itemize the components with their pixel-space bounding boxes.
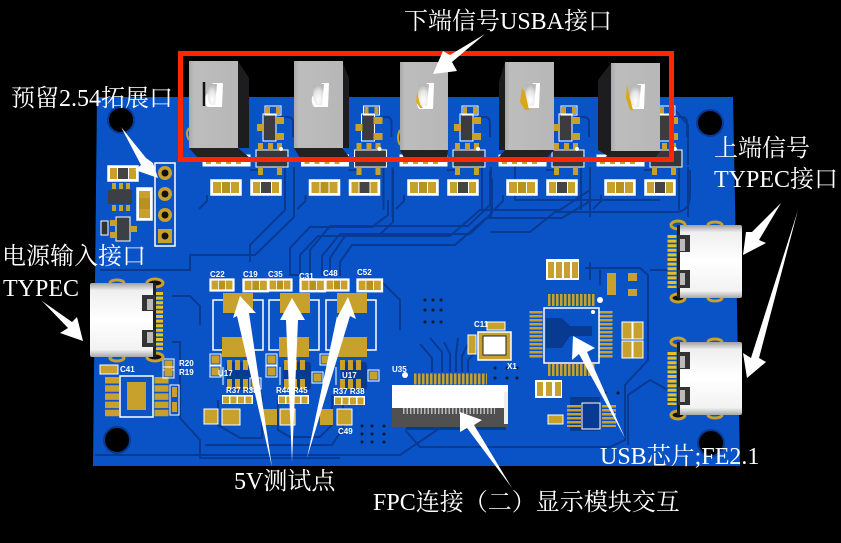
mounting holes — [104, 107, 724, 456]
crystal: X1 — [507, 362, 517, 371]
capacitor labels: C35 — [268, 270, 283, 279]
USB-A connector 3 — [398, 62, 448, 158]
small labels — [218, 369, 365, 436]
capacitor labels: C48 — [323, 269, 338, 278]
pins — [548, 294, 596, 306]
chip outline — [544, 308, 599, 363]
USB-C connector: upstream 1 — [671, 221, 742, 302]
regulators — [210, 354, 379, 405]
small labels: U17 — [342, 371, 357, 380]
power section: inductors and capacitors — [204, 268, 382, 436]
arrow: 5V test point 2 — [280, 298, 305, 462]
small labels: C49 — [338, 427, 353, 436]
arrow: 2.54 header — [121, 127, 158, 178]
crystal: C11 — [474, 320, 489, 329]
left power IC: C41 — [120, 365, 135, 374]
darker copper areas — [226, 318, 600, 431]
arrow: USB chip — [572, 336, 625, 438]
USB-A connector 2 — [294, 61, 350, 158]
label: power input: 电源输入接口 — [2, 243, 146, 270]
board outline — [93, 97, 740, 466]
label: USB chip: USB芯片;FE2.1 — [600, 443, 759, 470]
label: TYPEC: TYPEC — [3, 276, 79, 302]
small labels: R37 R38 — [333, 387, 365, 396]
small labels: R37 R38 — [226, 386, 258, 395]
USB-A connector 5 — [598, 63, 660, 158]
capacitor labels: C19 — [243, 270, 258, 279]
capacitor labels: C31 — [299, 272, 314, 281]
red highlight box — [180, 54, 672, 160]
left power IC — [100, 359, 194, 417]
via dots — [360, 298, 620, 444]
lower capacitors — [204, 409, 352, 425]
label: FPC connection: FPC连接（二）显示模块交互 — [373, 489, 680, 516]
capacitor row — [210, 279, 382, 292]
USB-C connector: upstream 2 — [671, 338, 742, 419]
capacitor labels: C52 — [357, 268, 372, 277]
heading: USBA interface: 下端信号USBA接口 — [404, 8, 612, 35]
USB chip FE2.1 — [536, 297, 606, 370]
crystal — [468, 320, 517, 371]
label: upstream signal: 上端信号 — [714, 135, 810, 162]
label: 2.54 expansion: 预留2.54拓展口 — [11, 85, 173, 112]
arrow: 5V test point 1 — [233, 296, 272, 467]
capacitor labels — [210, 268, 372, 281]
arrow: upper TYPEC — [743, 203, 781, 255]
2.54 pin header — [155, 163, 175, 246]
label: TYPEC interface: TYPEC接口 — [714, 166, 838, 193]
FPC connector: U35 — [392, 365, 407, 374]
parts around USB chip — [535, 259, 643, 429]
USB-A connector 4 — [498, 62, 554, 158]
panel: PCB board — [93, 97, 740, 466]
small labels: R44 R45 — [276, 386, 308, 395]
arrow: FPC — [460, 412, 512, 488]
small labels: U17 — [218, 369, 233, 378]
label: 5V test points: 5V测试点 — [234, 468, 336, 495]
arrow: power TYPEC — [42, 301, 83, 341]
inductors — [213, 293, 376, 357]
USB-C connector: power input — [90, 279, 163, 361]
USB-A connector 1 — [187, 61, 250, 158]
USB channel circuits — [199, 106, 688, 217]
small parts near pin header — [101, 166, 152, 241]
arrow: 5V test point 3 — [307, 297, 356, 458]
left power IC: R20 — [179, 359, 194, 368]
copper traces — [95, 110, 690, 458]
FPC connector — [392, 365, 508, 427]
left power IC: R19 — [179, 368, 194, 377]
arrow: USBA — [433, 34, 485, 74]
arrow: lower TYPEC — [743, 210, 798, 378]
capacitor labels: C22 — [210, 270, 225, 279]
